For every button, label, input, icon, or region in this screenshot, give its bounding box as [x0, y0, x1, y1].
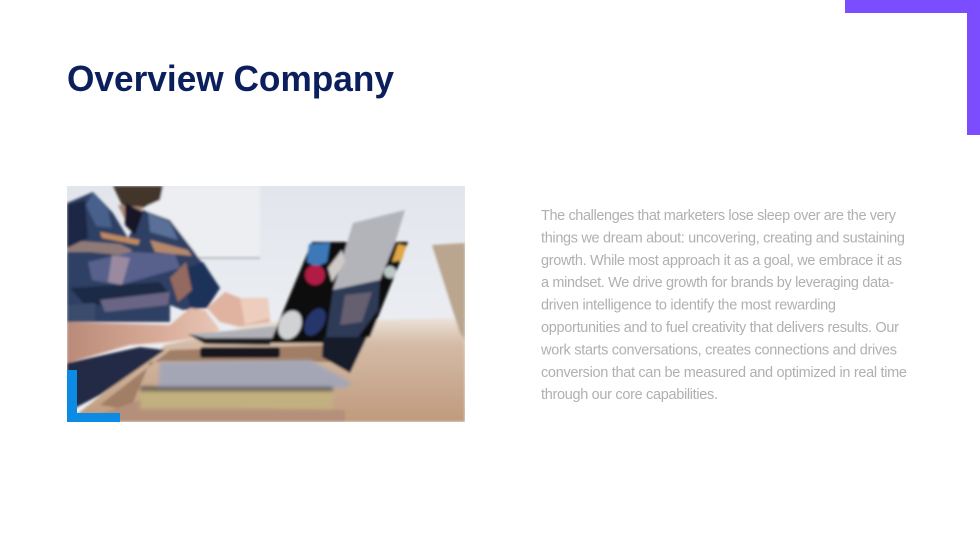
open laptop with stickers	[270, 210, 408, 373]
dark near table	[100, 345, 330, 410]
beard and neck	[113, 186, 163, 226]
body paragraph: things we dream about: uncovering, creating and sustaining	[541, 230, 905, 246]
front laptop base	[188, 326, 276, 345]
title: Overview Company	[67, 58, 394, 99]
tablet on table	[158, 360, 352, 388]
body paragraph: opportunities and to fuel creativity that delivers results. Our	[541, 320, 899, 336]
body paragraph	[540, 208, 907, 403]
blue corner accent	[67, 370, 120, 422]
trousers	[67, 347, 165, 412]
body paragraph: through our core capabilities.	[541, 387, 718, 403]
shirt	[67, 192, 220, 322]
body paragraph: a mindset. We drive growth for brands by leveraging data-	[541, 275, 894, 291]
right laptop	[432, 243, 465, 340]
body paragraph: conversion that can be measured and optimized in real time	[541, 365, 907, 381]
body paragraph: work starts conversations, creates connections and drives	[540, 342, 897, 358]
photo: man working at laptops	[67, 186, 465, 422]
body paragraph: The challenges that marketers lose sleep over are the very	[541, 208, 897, 224]
body paragraph: driven intelligence to identify the most rewarding	[541, 298, 836, 314]
table	[67, 318, 465, 422]
notebook	[140, 387, 333, 409]
decorative corner: purple	[845, 0, 980, 135]
wall panel	[147, 186, 260, 259]
body paragraph: growth. While most approach it as a goal, we embrace it as	[541, 253, 902, 269]
phone	[200, 347, 280, 358]
arms	[67, 292, 270, 363]
